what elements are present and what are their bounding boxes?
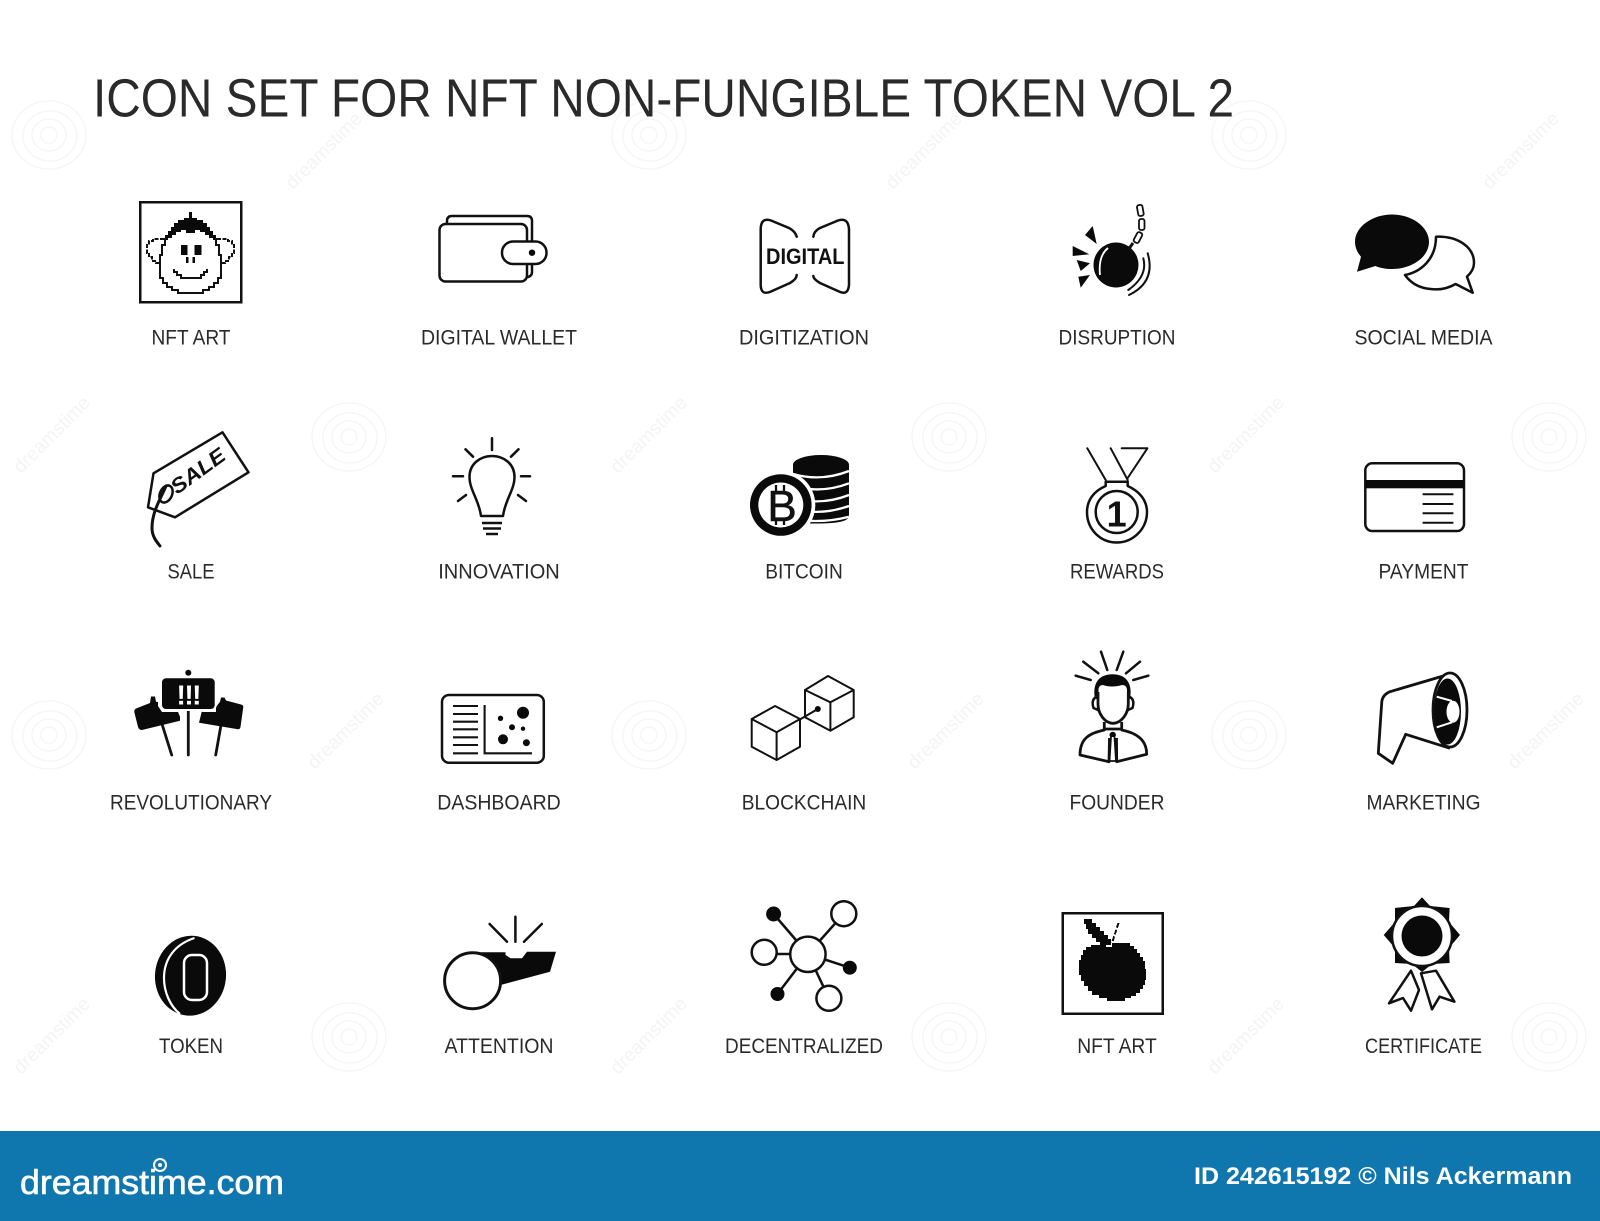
label: NFT ART [152, 326, 231, 350]
text: dreamstime [282, 109, 367, 194]
text: dreamstime [1204, 994, 1289, 1079]
panel: token [151, 932, 230, 1058]
icon: credit card [1365, 463, 1464, 531]
text: dreamstime [10, 393, 95, 478]
icon: light bulb [453, 438, 530, 534]
panel: rewards [1070, 448, 1164, 584]
panel: payment [1365, 463, 1469, 584]
icon: bitcoin and coin stack: B [767, 482, 797, 531]
credit text: ID 242615192 © Nils Ackermann [1194, 1163, 1572, 1190]
text: dreamstime [1479, 109, 1564, 194]
label: REVOLUTIONARY [110, 792, 272, 814]
panel: social media [1354, 214, 1492, 350]
icon: whistle [445, 917, 556, 1009]
icon: speech bubbles [1355, 214, 1474, 293]
footer band [0, 1131, 1600, 1221]
icon: linked cubes [752, 676, 854, 760]
text: dreamstime [882, 109, 967, 194]
panel: NFT art monkey [140, 202, 241, 350]
label: DASHBOARD [437, 792, 561, 814]
label: SALE [168, 560, 214, 584]
label: ATTENTION [444, 1035, 554, 1058]
icon: network hub [752, 901, 857, 1011]
panel: certificate [1365, 897, 1482, 1058]
icon: wrecking ball [1073, 205, 1150, 295]
panel: revolutionary [110, 670, 272, 814]
label: DISRUPTION [1058, 326, 1176, 350]
icon: digital ticket: DIGITAL [766, 244, 844, 269]
icon: coin with zero [151, 932, 230, 1019]
label: BLOCKCHAIN [742, 792, 866, 814]
panel: digitization [739, 220, 869, 350]
panel: attention [444, 917, 556, 1058]
label: MARKETING [1366, 792, 1480, 814]
label: PAYMENT [1378, 560, 1469, 584]
text: dreamstime [1504, 689, 1589, 774]
icon: sale tag: SALE [166, 443, 231, 499]
label: BITCOIN [765, 560, 843, 584]
icon: wallet [440, 216, 546, 282]
panel: sale [148, 432, 248, 584]
label: INNOVATION [438, 560, 560, 584]
text: dreamstime [304, 689, 389, 774]
title: ICON SET FOR NFT NON-FUNGIBLE TOKEN VOL 2 [93, 70, 1234, 128]
label: TOKEN [159, 1035, 223, 1058]
label: CERTIFICATE [1365, 1035, 1482, 1058]
logo: dreamstime: dreamstime.com [20, 1164, 284, 1202]
icon: pixel apple [1062, 913, 1162, 1014]
text: dreamstime [607, 393, 692, 478]
panel: innovation [438, 438, 560, 584]
panel: founder [1070, 652, 1164, 814]
icon: man with rays [1076, 652, 1148, 762]
label: FOUNDER [1070, 792, 1164, 814]
label: DIGITIZATION [739, 326, 869, 350]
label: REWARDS [1070, 560, 1164, 584]
icon: rosette award [1384, 897, 1460, 1011]
text: dreamstime [607, 994, 692, 1079]
panel: NFT art apple [1062, 913, 1162, 1058]
icon: pixel monkey [140, 202, 241, 302]
icon: sale tag [148, 432, 248, 546]
label: DECENTRALIZED [725, 1035, 883, 1058]
icon: megaphone [1378, 673, 1467, 763]
panel: disruption [1058, 205, 1176, 350]
label: NFT ART [1077, 1035, 1157, 1058]
icon: medal: 1 [1107, 494, 1127, 534]
panel: blockchain [742, 676, 866, 814]
label: SOCIAL MEDIA [1354, 326, 1492, 350]
icon: dashboard chart [442, 695, 544, 763]
text: dreamstime [1204, 393, 1289, 478]
panel: bitcoin [746, 455, 849, 584]
panel: digital wallet [421, 216, 577, 350]
panel: dashboard [437, 695, 561, 814]
icon: protest signs: !!! [176, 680, 202, 710]
text: dreamstime [904, 689, 989, 774]
panel: marketing [1366, 673, 1480, 814]
icon: protest signs [134, 670, 243, 755]
panel: decentralized [725, 901, 883, 1058]
label: DIGITAL WALLET [421, 326, 577, 350]
text: dreamstime [10, 994, 95, 1079]
